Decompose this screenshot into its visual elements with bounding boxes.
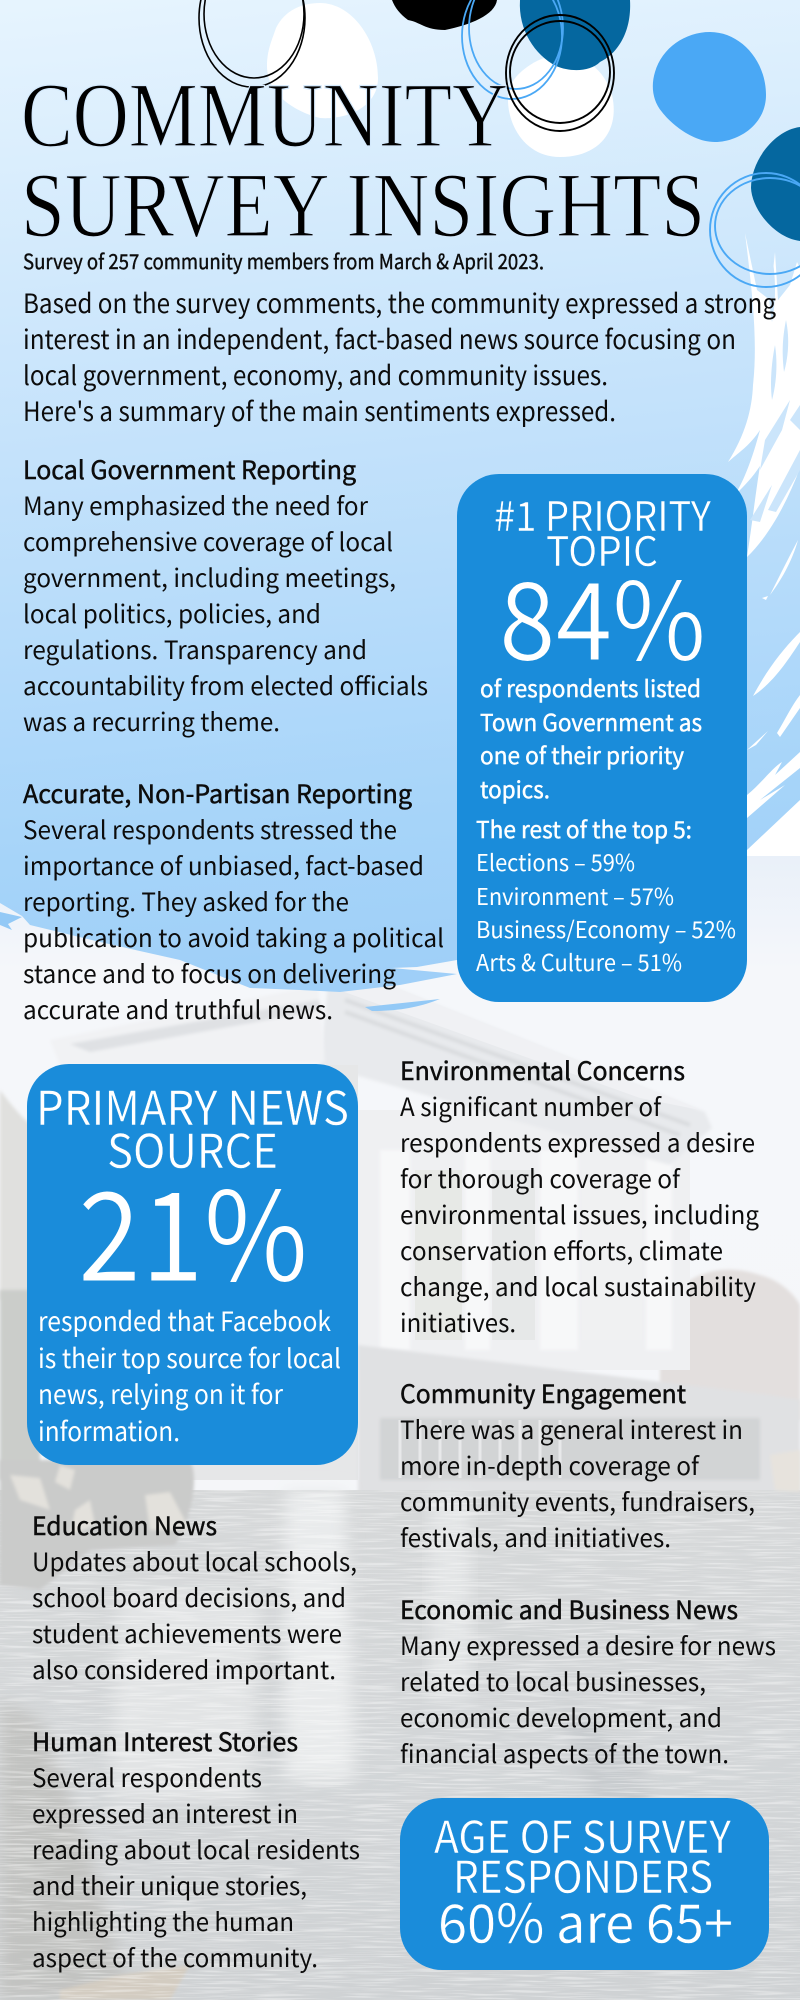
panel heading: #1 PRIORITY [494,483,711,543]
top 5 list: Business/Economy – 52% [476,911,736,945]
title [21,64,705,256]
section: environmental concerns: A significant number of [400,1088,662,1124]
stat description: one of their priority [480,737,684,771]
section: environmental concerns: for thorough coverage of [400,1160,681,1196]
section: local government reporting: Many emphasized the need for [23,487,368,523]
section: local government reporting: was a recurring theme. [23,703,280,739]
section: accurate non-partisan reporting [23,775,444,1027]
blob: dark blue top [520,0,630,70]
intro paragraph: local government, economy, and community issues. [23,354,608,393]
blue painted background with brush edge [0,0,800,992]
stat description: topics. [480,771,550,805]
section: accurate non-partisan reporting: accurate and truthful news. [23,991,333,1027]
section: community engagement: community events, fundraisers, [400,1483,755,1519]
panel: primary news source [27,1064,358,1465]
stat: 60% are 65+: 60% are 65+ [438,1880,733,1959]
blob: white left [267,3,378,118]
section: environmental concerns: conservation efforts, climate [400,1232,723,1268]
section: economic and business news: economic development, and [400,1699,722,1735]
stat description: news, relying on it for [38,1373,284,1412]
left trees [0,1092,27,1292]
stat description [38,1300,341,1449]
section: human interest stories: and their unique stories, [32,1867,307,1903]
section: economic and business news [400,1591,776,1771]
panel heading [494,483,711,578]
section: community engagement: Community Engagement [400,1375,687,1411]
section: community engagement: festivals, and initiatives. [400,1519,671,1555]
ring: black center [506,15,614,131]
top 5 list [476,811,736,978]
building columns background [660,1280,690,1370]
section: human interest stories: highlighting the human [32,1903,294,1939]
top 5 list: Environment – 57% [476,878,674,912]
intro paragraph [23,282,776,429]
stat description: information. [38,1410,180,1449]
section: accurate non-partisan reporting: stance and to focus on delivering [23,955,396,991]
building body behind panel [192,1068,358,1480]
section: human interest stories: Human Interest Stories [32,1723,298,1759]
panel heading: AGE OF SURVEY [434,1802,732,1866]
section: education news: Education News [32,1507,217,1543]
top 5 list: Arts & Culture – 51% [476,944,682,978]
section: community engagement [400,1375,755,1555]
section: human interest stories: reading about local residents [32,1831,360,1867]
roof side [322,992,710,1164]
section: environmental concerns: Environmental Concerns [400,1052,685,1088]
title: SURVEY INSIGHTS [21,154,705,256]
section: environmental concerns: respondents expressed a desire [400,1124,755,1160]
section: environmental concerns: initiatives. [400,1304,516,1340]
water [0,1490,800,2000]
white brush strokes on right [728,233,800,856]
section: education news: Updates about local schools, [32,1543,357,1579]
panel heading [434,1802,732,1906]
section: human interest stories: expressed an interest in [32,1795,298,1831]
section: human interest stories: aspect of the community. [32,1939,318,1975]
panel: age of survey responders [400,1798,769,1970]
blob: light blue [653,32,766,142]
rocks [0,1460,194,1590]
section: local government reporting: regulations. Transparency and [23,631,367,667]
blob: white center [508,55,614,157]
panel heading [36,1070,349,1182]
ring: light blue right [710,173,800,287]
section: accurate non-partisan reporting: Several respondents stressed the [23,811,397,847]
section: accurate non-partisan reporting: Accurate, Non-Partisan Reporting [23,775,412,811]
section: local government reporting: comprehensive coverage of local [23,523,393,559]
columns [380,1150,672,1350]
section: economic and business news: financial aspects of the town. [400,1735,729,1771]
blob: dark blue right [751,127,800,241]
stat: 84%: 84% [499,536,706,692]
ring: light blue center [462,0,563,99]
section: economic and business news: Many expressed a desire for news [400,1627,776,1663]
title: COMMUNITY [21,64,508,166]
section: local government reporting: local politics, policies, and [23,595,321,631]
section: education news: also considered important. [32,1651,336,1687]
panel heading: PRIMARY NEWS [36,1070,349,1139]
section: accurate non-partisan reporting: importance of unbiased, fact-based [23,847,424,883]
base wall and fence [358,1345,800,1500]
section: local government reporting: Local Government Reporting [23,451,356,487]
panel heading: TOPIC [546,518,658,578]
panel heading: RESPONDERS [453,1842,713,1906]
small brush strokes [0,912,440,1011]
section: economic and business news: Economic and Business News [400,1591,738,1627]
stat description [480,670,702,805]
top 5 list: The rest of the top 5: [476,811,692,845]
section: education news: student achievements were [32,1615,342,1651]
right trees [659,1269,800,1402]
panel: #1 priority topic [457,474,747,1002]
intro paragraph: interest in an independent, fact-based news source focusing on [23,318,736,357]
stat description: responded that Facebook [38,1300,331,1339]
top 5 list: Elections – 59% [476,844,635,878]
section: education news [32,1507,357,1687]
blue streaks in brush [750,255,800,522]
section: environmental concerns [400,1052,759,1340]
panel heading: SOURCE [107,1113,278,1182]
stat description: is their top source for local [38,1337,341,1376]
section: local government reporting: accountability from elected officials [23,667,428,703]
section: human interest stories [32,1723,360,1975]
section: human interest stories: Several respondents [32,1759,262,1795]
ring: black left [199,0,305,87]
decorative shapes [199,0,800,287]
stat: 21%: 21% [78,1137,308,1317]
section: environmental concerns: change, and local sustainability [400,1268,756,1304]
background photo: harbor building and water [0,855,800,2000]
section: community engagement: There was a general interest in [400,1411,743,1447]
intro paragraph: Here's a summary of the main sentiments expressed. [23,390,616,429]
stat description: of respondents listed [480,670,701,704]
section: environmental concerns: environmental issues, including [400,1196,759,1232]
section: local government reporting [23,451,428,739]
blob: black top [392,0,497,30]
section: accurate non-partisan reporting: publication to avoid taking a political [23,919,444,955]
section: accurate non-partisan reporting: reporting. They asked for the [23,883,349,919]
roof front [50,985,325,1065]
section: local government reporting: government, including meetings, [23,559,396,595]
section: education news: school board decisions, and [32,1579,346,1615]
section: community engagement: more in-depth coverage of [400,1447,700,1483]
subtitle: Survey of 257 community members from March & April 2023. [23,245,544,275]
stat description: Town Government as [480,704,702,738]
section: economic and business news: related to local businesses, [400,1663,706,1699]
